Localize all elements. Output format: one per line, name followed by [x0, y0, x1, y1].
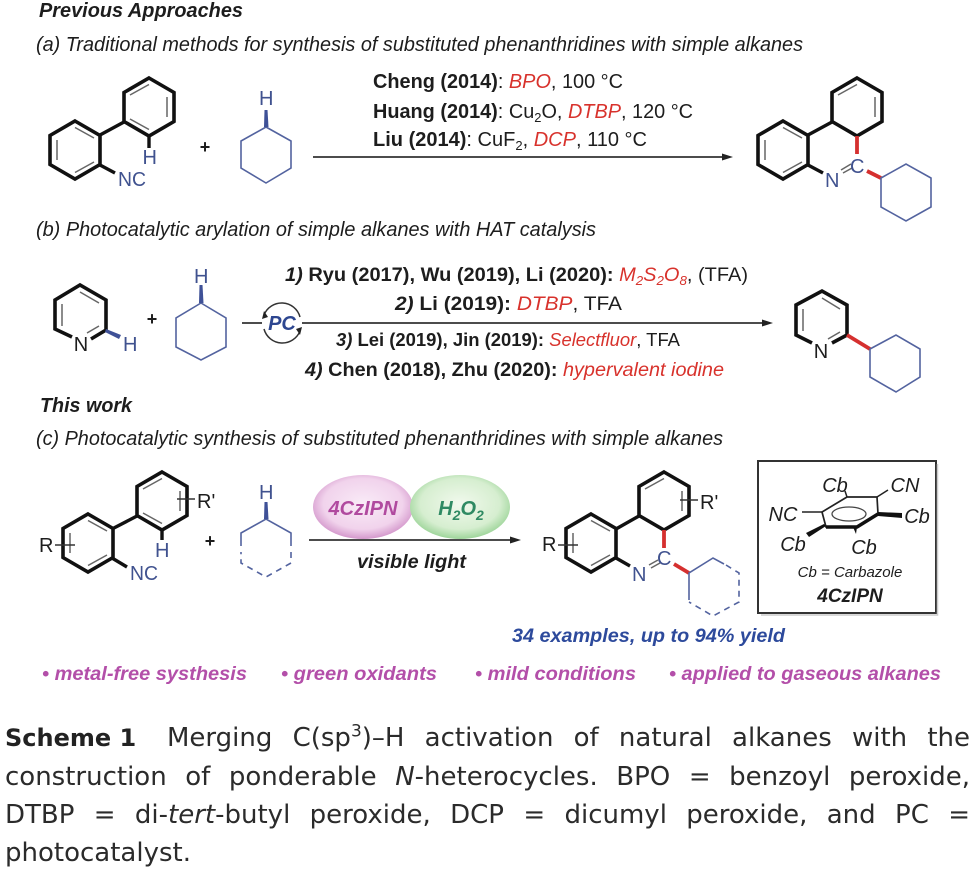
molecule: 2-cyclohexylpyridine product: [796, 291, 920, 392]
molecule: phenanthridine product: C: [850, 156, 864, 178]
reagent bubbles: 4CzIPN: [328, 498, 398, 520]
molecule: cyclohexane: [176, 266, 226, 360]
arrow: [313, 154, 733, 160]
molecule: substituted phenanthridine product: R: [542, 534, 556, 556]
reagent bubbles: [313, 475, 510, 539]
molecule: substituted phenanthridine product: R': [700, 492, 718, 514]
feature bullets: • applied to gaseous alkanes: [669, 663, 941, 685]
molecule: phenanthridine product: [758, 78, 931, 221]
caption: Scheme 1: [5, 724, 136, 752]
reagent bubbles: O: [460, 498, 476, 520]
labels: substituents: NC: [769, 504, 798, 526]
caption: [5, 721, 970, 868]
reagent bubbles: H: [438, 498, 453, 520]
feature bullets: • mild conditions: [475, 663, 636, 685]
reaction conditions: 2: [655, 273, 665, 288]
molecule: substituted phenanthridine product: [542, 472, 739, 616]
reagent bubbles: 2: [475, 507, 484, 523]
heading: previous approaches: Previous Approaches: [39, 0, 243, 22]
molecule: 2-isocyanobiphenyl: [50, 78, 174, 191]
reaction conditions: 2: [635, 273, 644, 288]
label: visible light: visible light: [357, 551, 468, 573]
molecule: 2-cyclohexylpyridine product: N: [814, 341, 828, 363]
molecule: phenanthridine product: N: [825, 170, 839, 192]
reaction conditions: 1) Ryu (2017), Wu (2019), Li (2020): M: [285, 264, 635, 286]
labels: substituents: Cb: [904, 506, 930, 528]
molecule: cyclohexane: [241, 88, 291, 183]
labels: substituents: Cb: [780, 534, 806, 556]
reaction conditions: ,: [523, 129, 534, 151]
reaction conditions: 2: [534, 110, 541, 125]
arrow with photocatalyst cycle: PC: [268, 313, 296, 335]
molecule: cyclohexane: H: [194, 266, 208, 288]
heading (c): (c) Photocatalytic synthesis of substituted phenanthridines with simple alkanes: [36, 428, 723, 450]
molecule: cyclohexane: H: [259, 88, 273, 110]
reaction conditions: O,: [541, 101, 568, 123]
heading: this work: This work: [40, 395, 133, 417]
reaction conditions: O: [664, 264, 679, 286]
arrow with photocatalyst cycle: [242, 303, 773, 343]
reaction conditions: [373, 71, 693, 153]
label: carbazole definition: Cb = Carbazole: [798, 564, 902, 581]
reaction conditions: 8: [679, 273, 688, 288]
caption: construction of ponderable N-heterocycles. BPO = benzoyl peroxide,: [5, 762, 970, 792]
caption: photocatalyst.: [5, 838, 191, 868]
reaction conditions: DTBP, 120 °C: [568, 101, 693, 123]
heading (b): (b) Photocatalytic arylation of simple alkanes with HAT catalysis: [36, 219, 596, 241]
feature bullets: [42, 663, 941, 685]
reaction conditions: , (TFA): [687, 264, 748, 286]
panel: (c) this work reaction: [36, 428, 938, 647]
label: 4CzIPN: 4CzIPN: [816, 586, 884, 607]
panel: (b) photocatalytic arylation: [36, 219, 920, 392]
reaction conditions: Liu (2014): CuF: [373, 129, 515, 151]
plus sign: +: [205, 531, 215, 551]
reaction conditions: [285, 264, 748, 381]
molecule: substituted phenanthridine product: C: [657, 548, 671, 570]
arrow: [309, 536, 521, 544]
molecule: substituted 2-isocyanobiphenyl: H: [155, 540, 169, 562]
panel: (a) traditional methods: [36, 34, 931, 221]
reaction conditions: 2) Li (2019): DTBP, TFA: [394, 293, 622, 315]
feature bullets: • metal-free systhesis: [42, 663, 247, 685]
feature bullets: • green oxidants: [281, 663, 437, 685]
yield callout: 34 examples, up to 94% yield: [512, 625, 786, 647]
molecule: generic alkane: H: [259, 482, 273, 504]
caption: Merging C(sp3)–H activation of natural alkanes with the: [167, 721, 970, 753]
labels: substituents: Cb: [822, 475, 848, 497]
molecule: generic alkane: [241, 482, 291, 577]
molecule: substituted phenanthridine product: N: [632, 564, 646, 586]
molecule: pyridine: N: [74, 334, 88, 356]
caption: DTBP = di-tert-butyl peroxide, DCP = dicumyl peroxide, and PC =: [5, 800, 970, 830]
structure: 4CzIPN core: [802, 490, 902, 537]
reaction conditions: S: [643, 264, 657, 286]
reaction conditions: 4) Chen (2018), Zhu (2020): hypervalent iodine: [304, 359, 724, 381]
plus sign: +: [147, 309, 157, 329]
labels: substituents: CN: [891, 475, 920, 497]
molecule: substituted 2-isocyanobiphenyl: [39, 472, 215, 585]
molecule: pyridine: H: [123, 334, 137, 356]
molecule: 2-isocyanobiphenyl: H: [142, 147, 157, 169]
reaction conditions: 2: [515, 138, 523, 153]
reaction conditions: DCP, 110 °C: [534, 129, 647, 151]
labels: substituents: Cb: [851, 537, 877, 559]
molecule: substituted 2-isocyanobiphenyl: NC: [130, 563, 158, 585]
reaction conditions: Cheng (2014): BPO, 100 °C: [373, 71, 623, 93]
reaction conditions: 3) Lei (2019), Jin (2019): Selectfluor, TFA: [336, 329, 681, 350]
heading (a): (a) Traditional methods for synthesis of substituted phenanthridines with simple alkanes: [36, 34, 803, 56]
molecule: substituted 2-isocyanobiphenyl: R': [197, 491, 215, 513]
molecule: pyridine: [55, 285, 137, 356]
molecule: 2-isocyanobiphenyl: NC: [118, 169, 146, 191]
reaction conditions: Huang (2014): Cu: [373, 101, 534, 123]
labels: substituents: [769, 475, 930, 559]
panel: 4CzIPN structure box: [758, 461, 938, 615]
plus sign: +: [200, 137, 210, 157]
molecule: substituted 2-isocyanobiphenyl: R: [39, 535, 53, 557]
reagent bubbles: 2: [452, 507, 461, 523]
